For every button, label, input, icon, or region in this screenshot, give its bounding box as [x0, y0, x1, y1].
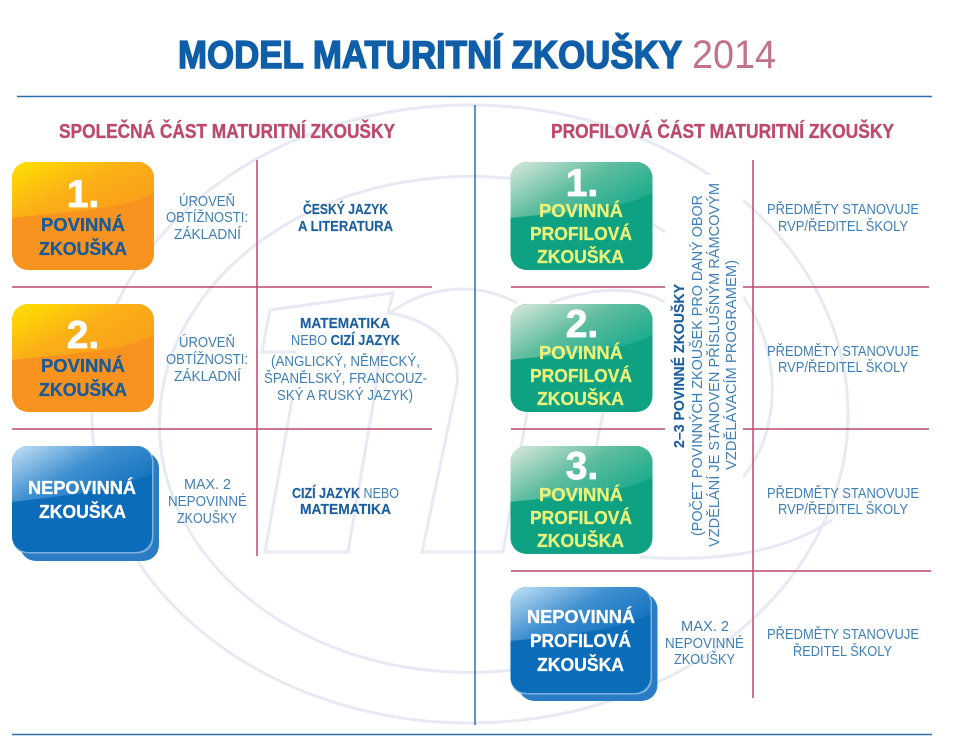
- box: nepovinná zkouška: [12, 446, 159, 561]
- box: 1. povinná profilová zkouška: 1.: [566, 162, 598, 205]
- box: 3. povinná profilová zkouška: POVINNÁ: [539, 484, 623, 505]
- title: MODEL MATURITNÍ ZKOUŠKY: [178, 32, 682, 77]
- text: max. 2 nepovinné zkoušky profilové: MAX. 2: [681, 619, 729, 635]
- box: 3. povinná profilová zkouška: ZKOUŠKA: [537, 530, 624, 551]
- title: 2014: [692, 33, 776, 77]
- box: nepovinná zkouška: NEPOVINNÁ: [28, 477, 136, 498]
- box: 1. povinná zkouška: ZKOUŠKA: [39, 238, 127, 259]
- text: předměty stanovuje ředitel školy: PŘEDMĚTY STANOVUJE: [767, 626, 919, 643]
- box: 1. povinná profilová zkouška: POVINNÁ: [539, 200, 623, 221]
- text: předměty stanovuje 2: [767, 343, 919, 376]
- box: 2. povinná profilová zkouška: ZKOUŠKA: [537, 388, 624, 409]
- box: nepovinná profilová zkouška: ZKOUŠKA: [537, 654, 624, 675]
- heading: společná část: SPOLEČNÁ ČÁST MATURITNÍ ZKOUŠKY: [59, 119, 396, 143]
- text: úroveň obtížnosti 1: OBTÍŽNOSTI:: [166, 209, 248, 226]
- vertical text: 2–3 povinné zkoušky: VZDĚLÁVACÍM PROGRAMEM): [723, 260, 740, 470]
- box: nepovinná profilová zkouška: NEPOVINNÁ: [527, 606, 635, 627]
- vertical text: 2–3 povinné zkoušky: 2–3 POVINNÉ ZKOUŠKY: [670, 284, 688, 448]
- box: 2. povinná zkouška: 2.: [67, 314, 99, 357]
- box: 3. povinná profilová zkouška: 3.: [566, 445, 598, 488]
- vertical text: 2–3 povinné zkoušky: (POČET POVINNÝCH ZKOUŠEK PRO DANÝ OBOR: [689, 195, 706, 536]
- box: 1. povinná zkouška: POVINNÁ: [41, 214, 125, 235]
- text: předměty stanovuje ředitel školy: [767, 626, 919, 660]
- box: 2. povinná profilová zkouška: PROFILOVÁ: [530, 365, 632, 386]
- text: předměty stanovuje 1: RVP/ŘEDITEL ŠKOLY: [778, 218, 908, 235]
- box: 2. povinná profilová zkouška: POVINNÁ: [539, 342, 623, 363]
- text: český jazyk: ČESKÝ JAZYK: [303, 200, 388, 218]
- text: český jazyk: [298, 200, 393, 235]
- box: 1. povinná zkouška: [12, 162, 154, 270]
- box: 1. povinná profilová zkouška: [510, 162, 652, 270]
- text: matematika nebo cizí jazyk: MATEMATIKA: [300, 316, 390, 332]
- vertical text: 2–3 povinné zkoušky: VZDĚLÁNÍ JE STANOVEN PŘÍSLUŠNÝM RÁMCOVÝM: [706, 183, 723, 547]
- text: úroveň obtížnosti 2: OBTÍŽNOSTI:: [166, 351, 248, 368]
- text: matematika nebo cizí jazyk: [264, 316, 427, 404]
- text: úroveň obtížnosti 2: [166, 334, 248, 385]
- text: matematika nebo cizí jazyk: SKÝ A RUSKÝ JAZYK): [277, 387, 413, 404]
- text: úroveň obtížnosti 1: [166, 193, 248, 243]
- text: český jazyk: A LITERATURA: [298, 219, 393, 235]
- text: max. 2 nepovinné zkoušky: [168, 477, 247, 527]
- text: předměty stanovuje ředitel školy: ŘEDITEL ŠKOLY: [793, 643, 892, 660]
- text: max. 2 nepovinné zkoušky profilové: [665, 619, 744, 668]
- text: úroveň obtížnosti 2: ZÁKLADNÍ: [174, 368, 241, 385]
- text: předměty stanovuje 2: RVP/ŘEDITEL ŠKOLY: [778, 359, 908, 376]
- box: 2. povinná profilová zkouška: [510, 303, 652, 412]
- box: 2. povinná zkouška: [12, 304, 154, 412]
- text: předměty stanovuje 3: [767, 485, 919, 518]
- text: max. 2 nepovinné zkoušky: NEPOVINNÉ: [168, 493, 247, 510]
- text: max. 2 nepovinné zkoušky: MAX. 2: [184, 477, 231, 493]
- box: nepovinná zkouška: ZKOUŠKA: [39, 501, 126, 522]
- text: úroveň obtížnosti 1: ÚROVEŇ: [179, 193, 235, 210]
- box: nepovinná profilová zkouška: PROFILOVÁ: [530, 630, 631, 651]
- text: matematika nebo cizí jazyk: NEBO CIZÍ JAZYK: [291, 332, 400, 349]
- text: úroveň obtížnosti 2: ÚROVEŇ: [179, 334, 235, 351]
- box: 1. povinná profilová zkouška: PROFILOVÁ: [530, 223, 632, 244]
- text: max. 2 nepovinné zkoušky profilové: NEPOVINNÉ: [665, 635, 744, 652]
- text: předměty stanovuje 2: PŘEDMĚTY STANOVUJE: [767, 343, 919, 360]
- text: předměty stanovuje 3: RVP/ŘEDITEL ŠKOLY: [778, 501, 908, 518]
- text: max. 2 nepovinné zkoušky: ZKOUŠKY: [177, 510, 237, 527]
- heading: profilová část: PROFILOVÁ ČÁST MATURITNÍ ZKOUŠKY: [551, 119, 895, 143]
- box: 1. povinná profilová zkouška: ZKOUŠKA: [537, 246, 624, 267]
- grid lines: [12, 160, 931, 698]
- vertical text: 2–3 povinné zkoušky: [670, 183, 740, 547]
- box: 3. povinná profilová zkouška: [510, 445, 652, 554]
- background watermark: [92, 105, 848, 723]
- text: cizí jazyk nebo matematika: CIZÍ JAZYK NEBO: [292, 485, 399, 502]
- text: předměty stanovuje 1: PŘEDMĚTY STANOVUJE: [767, 201, 919, 218]
- text: max. 2 nepovinné zkoušky profilové: ZKOUŠKY: [674, 651, 735, 668]
- box: 2. povinná zkouška: POVINNÁ: [41, 355, 125, 376]
- box: 3. povinná profilová zkouška: PROFILOVÁ: [530, 507, 632, 528]
- box: 2. povinná profilová zkouška: 2.: [566, 303, 598, 346]
- box: 2. povinná zkouška: ZKOUŠKA: [39, 379, 127, 400]
- box: 1. povinná zkouška: 1.: [67, 173, 99, 216]
- text: cizí jazyk nebo matematika: [292, 485, 399, 518]
- box: nepovinná profilová zkouška: [510, 587, 658, 701]
- text: cizí jazyk nebo matematika: MATEMATIKA: [300, 502, 391, 518]
- text: matematika nebo cizí jazyk: ŠPANĚLSKÝ, FRANCOUZ-: [264, 370, 427, 387]
- text: předměty stanovuje 3: PŘEDMĚTY STANOVUJE: [767, 485, 919, 502]
- text: úroveň obtížnosti 1: ZÁKLADNÍ: [174, 226, 241, 243]
- text: matematika nebo cizí jazyk: (ANGLICKÝ, NĚMECKÝ,: [271, 353, 420, 370]
- text: předměty stanovuje 1: [767, 201, 919, 235]
